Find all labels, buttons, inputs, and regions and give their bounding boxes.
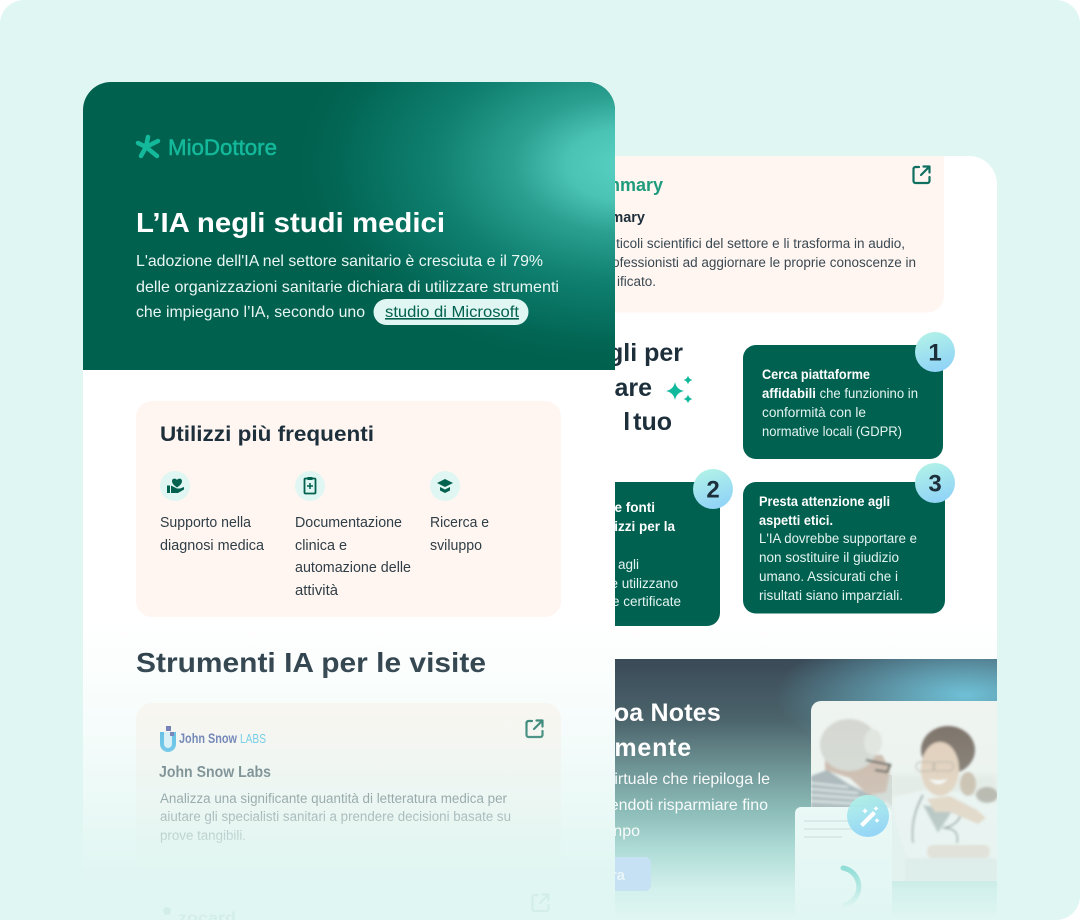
number badge 3: 3 xyxy=(928,470,942,498)
panel: main page front xyxy=(83,82,615,920)
label: Documentazione xyxy=(295,514,402,531)
tool description: aiutare gli specialisti sanitari a prendere decisioni basate su xyxy=(160,809,511,824)
tool description: prove tangibili. xyxy=(160,828,246,843)
number badge 3 xyxy=(915,463,955,503)
tip text: non sostituire il giudizio xyxy=(759,550,899,565)
John Snow Labs logo: John Snow xyxy=(179,731,237,746)
document card xyxy=(795,807,892,920)
heading: AI tools: Strumenti IA per le visite xyxy=(136,647,486,678)
header background xyxy=(83,82,615,370)
panel: most frequent uses xyxy=(136,401,561,617)
tip text: aspetti etici. xyxy=(759,513,833,528)
label: Supporto nella xyxy=(160,514,252,531)
MioDottore logo: MioDottore xyxy=(168,135,277,160)
intro text: delle organizzazioni sanitarie dichiara di utilizzare strumenti xyxy=(136,279,559,296)
icon: external link xyxy=(914,166,930,183)
heading: tips: gli per xyxy=(608,339,683,367)
patient's hair xyxy=(820,719,878,771)
tool description xyxy=(160,791,511,843)
use: clinical documentation xyxy=(295,471,411,599)
icon: external link xyxy=(526,720,542,737)
banner background xyxy=(600,659,997,920)
John Snow Labs logo: LABS xyxy=(240,731,266,746)
panel background xyxy=(83,82,615,920)
banner text: npo xyxy=(613,823,640,840)
tip text: conformità con le xyxy=(762,405,866,420)
panel: advice page behind xyxy=(600,156,998,920)
intro text: L'adozione dell'IA nel settore sanitario è cresciuta e il 79% xyxy=(136,253,543,270)
intro text: che impiegano l’IA, secondo uno xyxy=(136,304,365,321)
heading: Utilizzi più frequenti xyxy=(160,423,374,446)
banner button: ra xyxy=(611,867,626,884)
tip text: L'IA dovrebbe supportare e xyxy=(759,531,917,546)
use: diagnosis support xyxy=(160,471,265,554)
banner: Noa Notes xyxy=(600,659,998,920)
number badge 2 xyxy=(693,469,733,509)
tip text: normative locali (GDPR) xyxy=(762,424,902,439)
label: clinica e xyxy=(295,537,347,554)
soft fade above banner xyxy=(600,620,997,659)
icon: clipboard xyxy=(295,471,325,501)
tool description: ofessionisti ad aggiornare le proprie conoscenze in xyxy=(612,255,916,270)
card background xyxy=(743,482,945,614)
card background xyxy=(600,156,944,312)
panel background xyxy=(600,156,997,920)
tip text: e utilizzano xyxy=(610,576,678,591)
progress ring xyxy=(843,868,859,905)
card background xyxy=(136,703,561,875)
tool description: ticoli scientifici del settore e li trasforma in audio, xyxy=(616,236,905,251)
banner button xyxy=(600,857,651,891)
doctor's coat xyxy=(902,791,970,824)
tip text: umano. Assicurati che i xyxy=(759,569,898,584)
bottom fade overlay xyxy=(0,620,615,920)
icon: magic wand badge xyxy=(847,795,889,837)
label: automazione delle xyxy=(295,559,411,576)
label: diagnosi medica xyxy=(160,537,265,554)
banner heading xyxy=(614,699,721,762)
label xyxy=(430,514,489,554)
card background xyxy=(743,345,943,459)
label xyxy=(160,514,265,554)
card background xyxy=(136,401,561,617)
use: research and development xyxy=(430,471,489,554)
heading: tips: l tuo xyxy=(623,408,672,436)
card: tool summary xyxy=(600,156,944,312)
doctor's face xyxy=(921,742,959,796)
banner text xyxy=(610,771,770,840)
tool logo: mmary xyxy=(604,175,663,195)
intro text xyxy=(136,253,559,321)
tip text: e certificate xyxy=(612,594,681,609)
label: attività xyxy=(295,582,339,599)
hair and bun xyxy=(921,726,975,774)
tip text: Cerca piattaforme xyxy=(762,367,870,382)
tool description: ificato. xyxy=(617,274,656,289)
icon: external link xyxy=(532,894,548,911)
banner heading: mente xyxy=(614,734,692,762)
tool description xyxy=(612,236,916,289)
patient's face and neck xyxy=(825,755,890,795)
heading: tips xyxy=(608,339,683,436)
photo: doctor and patient xyxy=(811,701,998,881)
tip text: Presta attenzione agli xyxy=(759,494,890,509)
tip card 2 xyxy=(600,469,733,626)
card: John Snow Labs xyxy=(136,703,561,875)
number badge 2: 2 xyxy=(706,476,720,504)
icon: sparkles xyxy=(666,376,692,404)
icon: graduation cap xyxy=(430,471,460,501)
tool description: Analizza una significante quantità di letteratura medica per xyxy=(160,791,507,806)
tip text: risultati siano imparziali. xyxy=(759,588,903,603)
John Snow Labs logo xyxy=(162,726,266,750)
tip text xyxy=(762,367,918,439)
card: next tool, faded xyxy=(163,894,548,920)
link pill: Microsoft study xyxy=(374,299,528,325)
header xyxy=(83,82,615,370)
tip text: affidabili che funzionino in xyxy=(762,386,918,401)
card background xyxy=(600,482,720,626)
patient's white coat area xyxy=(885,802,892,807)
tip text: le fonti xyxy=(611,500,655,515)
tip text xyxy=(759,494,917,603)
number badge 1: 1 xyxy=(928,340,942,366)
number badge 1 xyxy=(915,332,955,372)
icon: hand with heart xyxy=(160,471,190,501)
doctor's hand xyxy=(927,796,986,824)
title: L’IA negli studi medici xyxy=(136,207,445,238)
tip text: agli xyxy=(618,557,639,572)
patient's shirt xyxy=(811,770,888,807)
tip card 3 xyxy=(743,463,955,614)
heading: tips: are xyxy=(614,374,652,402)
tip text xyxy=(610,500,681,609)
banner heading: oa Notes xyxy=(614,699,721,727)
tip text: lizzi per la xyxy=(610,519,675,534)
tool name: mary xyxy=(610,210,645,226)
tool name: John Snow Labs xyxy=(159,764,271,781)
patient's glasses xyxy=(866,760,890,772)
label: Ricerca e xyxy=(430,514,489,531)
label xyxy=(295,514,411,599)
banner text: endoti risparmiare fino xyxy=(610,797,768,814)
tip card 1 xyxy=(743,332,955,459)
banner text: irtuale che riepiloga le xyxy=(614,771,770,788)
label: sviluppo xyxy=(430,537,482,554)
link pill: Microsoft study: studio di Microsoft xyxy=(385,304,520,321)
tool logo xyxy=(163,907,236,920)
